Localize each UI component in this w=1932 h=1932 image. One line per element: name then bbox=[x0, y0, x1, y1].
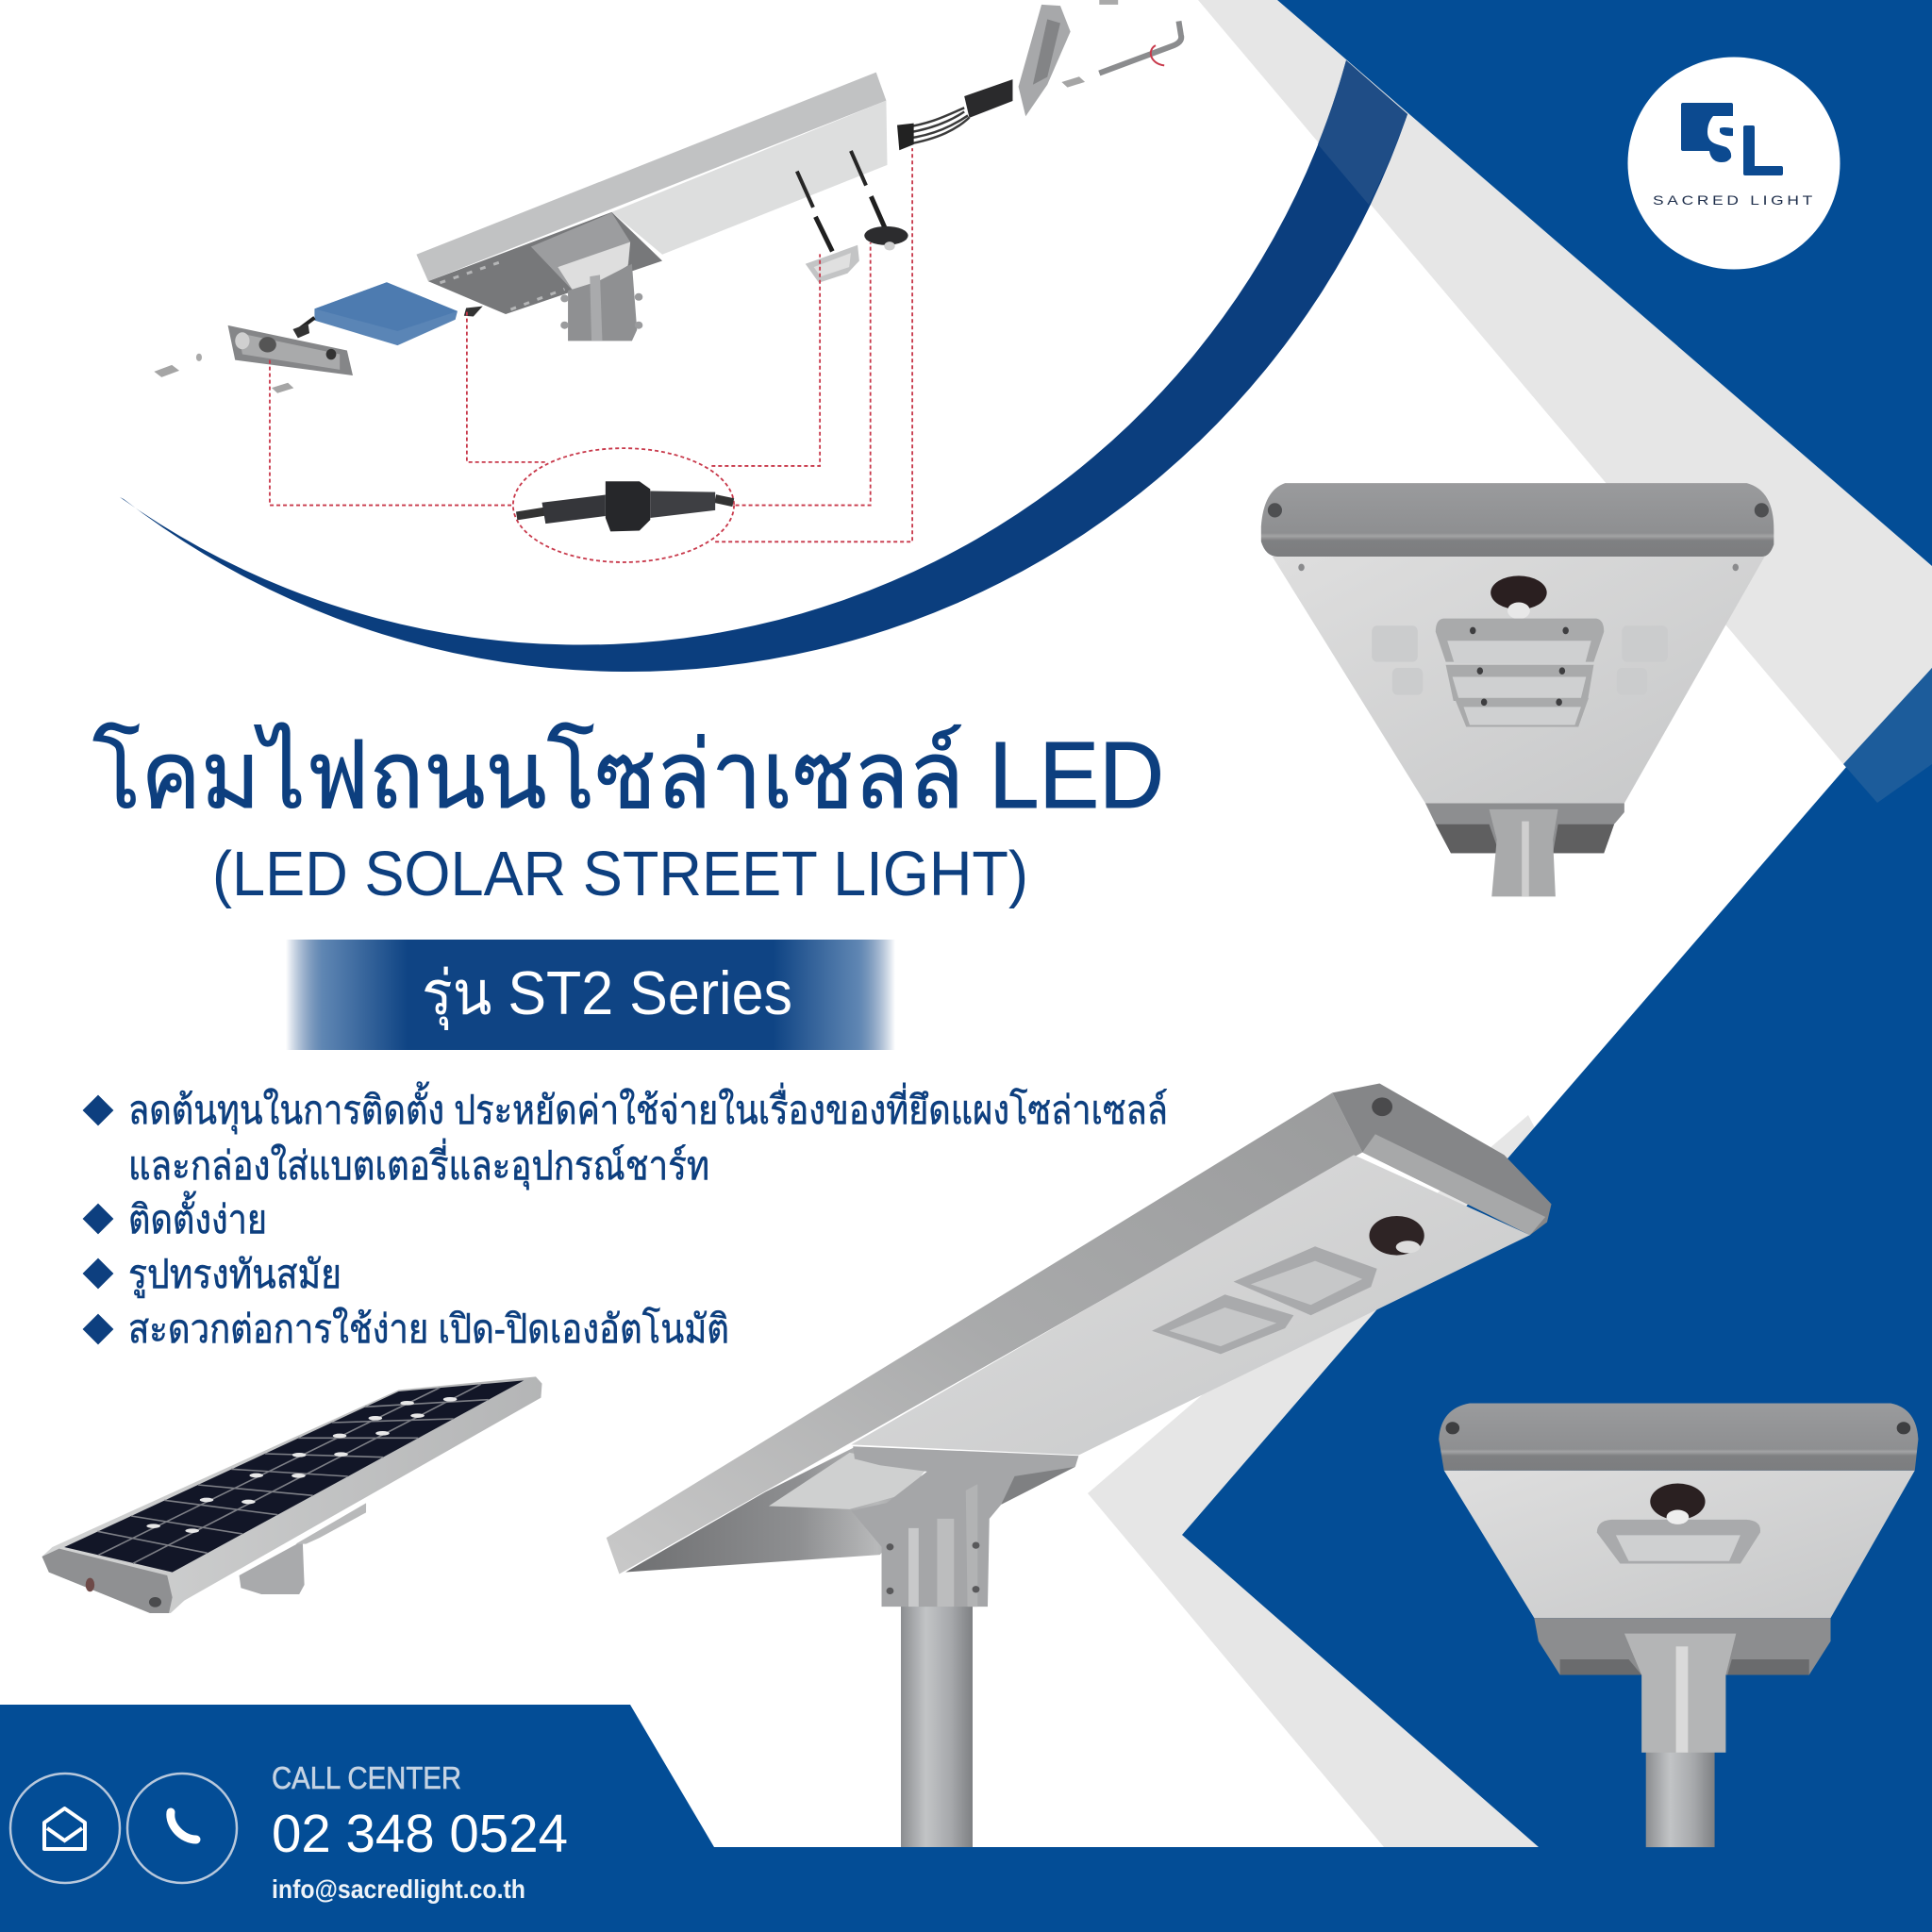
feature list bbox=[83, 1081, 1168, 1351]
frame bbox=[42, 1376, 542, 1613]
icon: envelope bbox=[10, 1774, 120, 1883]
lamp panel bbox=[1273, 557, 1765, 803]
background: lower gray chevron bbox=[1088, 1115, 1585, 1847]
curved swoosh bbox=[120, 60, 1407, 672]
lamp base bbox=[1425, 803, 1624, 896]
LED module and sensor bbox=[797, 151, 908, 283]
product view: angled lamp on pole bbox=[607, 1084, 1552, 1847]
housing body bbox=[416, 73, 888, 341]
right end cap and controller bbox=[897, 5, 1071, 150]
base bbox=[1534, 1618, 1831, 1753]
waterproof cable connector bbox=[517, 481, 733, 531]
background: top right blue area bbox=[1277, 0, 1932, 566]
bullet 1: และกล่องใส่แบตเตอรี่และอุปกรณ์ชาร์ท bbox=[128, 1139, 709, 1191]
rear shade and mounting bracket bbox=[625, 1446, 1078, 1607]
LED modules bbox=[1436, 619, 1604, 726]
end cap bbox=[42, 1549, 173, 1613]
logo bbox=[1628, 57, 1840, 270]
call center label: CALL CENTER bbox=[272, 1760, 461, 1795]
product view: lamp on blue background bbox=[1439, 1403, 1918, 1847]
bullet 1: ลดต้นทุนในการติดตั้ง ประหยัดค่าใช้จ่ายในเรื่องของที่ยึดแผงโซล่าเซลล์ bbox=[128, 1081, 1168, 1135]
solar cells bbox=[64, 1380, 524, 1573]
series label: รุ่น ST2 Series bbox=[422, 958, 792, 1031]
product view: solar panel lamp bbox=[42, 1376, 542, 1613]
bullet 3: รูปทรงทันสมัย bbox=[128, 1252, 341, 1298]
pole bbox=[1646, 1750, 1715, 1847]
background: lower right blue area bbox=[1182, 668, 1932, 1847]
LED module bbox=[1597, 1520, 1760, 1564]
battery pack bbox=[292, 282, 483, 345]
bullet 1 bbox=[83, 1081, 1168, 1191]
left end cap bbox=[154, 325, 353, 393]
motion sensor bbox=[1491, 575, 1547, 619]
motion sensor bbox=[1369, 1216, 1424, 1256]
logo white circle bbox=[1628, 57, 1840, 270]
icon: phone bbox=[127, 1774, 237, 1883]
series banner bbox=[286, 940, 895, 1050]
pole bbox=[901, 1604, 973, 1847]
end cap sensors bbox=[86, 1578, 161, 1607]
footer band bbox=[0, 1705, 1932, 1932]
allen key and screws bbox=[1061, 0, 1181, 88]
logo wordmark: SACRED LIGHT bbox=[1653, 192, 1816, 208]
mounting bracket bbox=[240, 1503, 366, 1594]
top bar bbox=[1439, 1403, 1918, 1471]
subtitle: (LED SOLAR STREET LIGHT) bbox=[212, 839, 1028, 909]
motion sensor bbox=[1650, 1484, 1706, 1524]
phone number: 02 348 0524 bbox=[272, 1804, 568, 1864]
LED modules bbox=[1152, 1246, 1377, 1354]
title: โคมไฟถนนโซล่าเซลล์ LED bbox=[92, 723, 1164, 828]
background: gray diagonal band bbox=[1198, 0, 1932, 764]
panel bbox=[1444, 1471, 1915, 1618]
lamp top bar bbox=[1261, 483, 1774, 557]
lamp top face bbox=[607, 1092, 1362, 1574]
product view: front lamp bbox=[1261, 483, 1774, 896]
lamp underside panel bbox=[851, 1155, 1530, 1455]
lamp end cap bbox=[1332, 1084, 1552, 1235]
bullet 2: ติดตั้งง่าย bbox=[128, 1191, 267, 1241]
bullet 2 bbox=[83, 1191, 267, 1241]
red dashed wiring lines bbox=[270, 148, 912, 562]
background: translucent blue patch bbox=[1843, 668, 1932, 803]
email: info@sacredlight.co.th bbox=[272, 1874, 525, 1904]
logo mark bbox=[1681, 103, 1783, 175]
exploded assembly diagram bbox=[154, 0, 1181, 562]
bullet 4: สะดวกต่อการใช้ง่าย เปิด-ปิดเองอัตโนมัติ bbox=[128, 1306, 729, 1351]
